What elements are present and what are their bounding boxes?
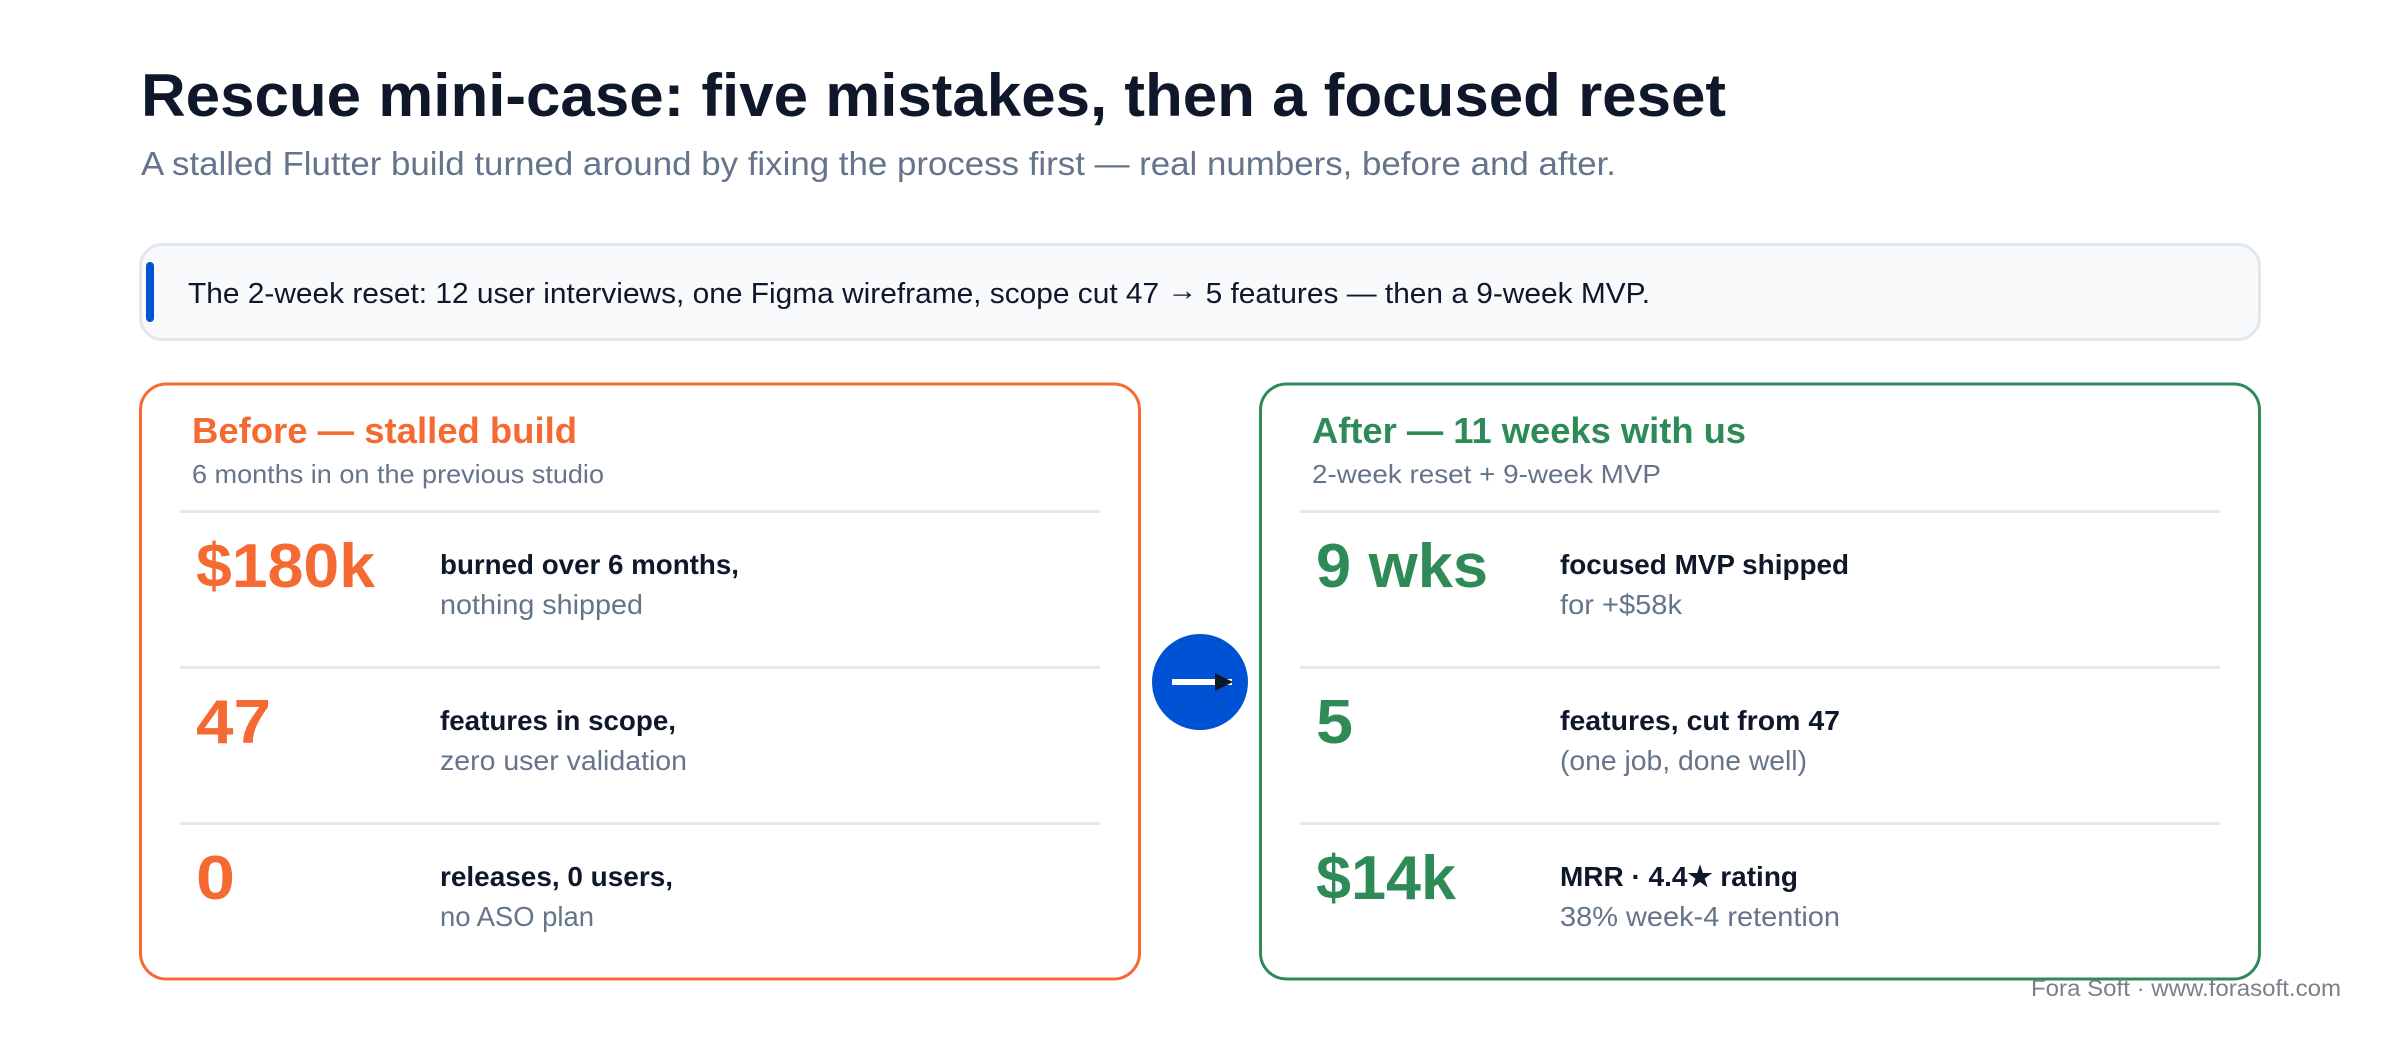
footer credit: Fora Soft · www.forasoft.com bbox=[2031, 975, 2341, 1001]
stat 0: 0 bbox=[196, 844, 235, 913]
after row: features bbox=[1316, 688, 1840, 776]
before subheading: 6 months in on the previous studio bbox=[192, 459, 604, 489]
arrow: before to after bbox=[1152, 634, 1248, 730]
before row: burn bbox=[196, 532, 739, 620]
label: focused MVP shipped bbox=[1560, 549, 1849, 580]
before row: features bbox=[196, 688, 687, 776]
before panel frame bbox=[140, 384, 1140, 979]
stat $14k: $14k bbox=[1316, 844, 1457, 913]
stat 9 wks: 9 wks bbox=[1316, 532, 1488, 601]
callout: the 2-week reset bbox=[140, 244, 2260, 340]
before row: releases bbox=[196, 844, 673, 932]
callout box bbox=[140, 244, 2260, 340]
sublabel: no ASO plan bbox=[440, 901, 594, 932]
label: burned over 6 months, bbox=[440, 549, 739, 580]
stat $180k: $180k bbox=[196, 532, 376, 601]
stat 47: 47 bbox=[196, 688, 271, 757]
after row: MVP bbox=[1316, 532, 1849, 620]
label: MRR · 4.4★ rating bbox=[1560, 861, 1798, 892]
after heading: After — 11 weeks with us bbox=[1312, 410, 1746, 451]
stat 5: 5 bbox=[1316, 688, 1353, 757]
title: Rescue mini-case: five mistakes, then a focused reset bbox=[141, 62, 1726, 129]
after panel frame bbox=[1260, 384, 2260, 979]
sublabel: (one job, done well) bbox=[1560, 745, 1807, 776]
sublabel: nothing shipped bbox=[440, 589, 643, 620]
sublabel: 38% week-4 retention bbox=[1560, 901, 1840, 932]
label: releases, 0 users, bbox=[440, 861, 673, 892]
after subheading: 2-week reset + 9-week MVP bbox=[1312, 459, 1661, 489]
label: features, cut from 47 bbox=[1560, 705, 1840, 736]
panel: after bbox=[1260, 384, 2260, 979]
callout text: The 2-week reset: 12 user interviews, one Figma wireframe, scope cut 47 bbox=[188, 278, 1131, 310]
label: features in scope, bbox=[440, 705, 676, 736]
after row: revenue bbox=[1316, 844, 1840, 932]
panel: before bbox=[140, 384, 1140, 979]
callout text: → bbox=[1167, 275, 1197, 307]
subtitle: A stalled Flutter build turned around by fixing the process first — real numbers, before and after. bbox=[141, 145, 1616, 182]
callout accent bar bbox=[146, 262, 154, 322]
sublabel: zero user validation bbox=[440, 745, 687, 776]
sublabel: for +$58k bbox=[1560, 589, 1683, 620]
before heading: Before — stalled build bbox=[192, 410, 577, 451]
callout text: 5 features — then a 9-week MVP. bbox=[1197, 278, 1650, 310]
